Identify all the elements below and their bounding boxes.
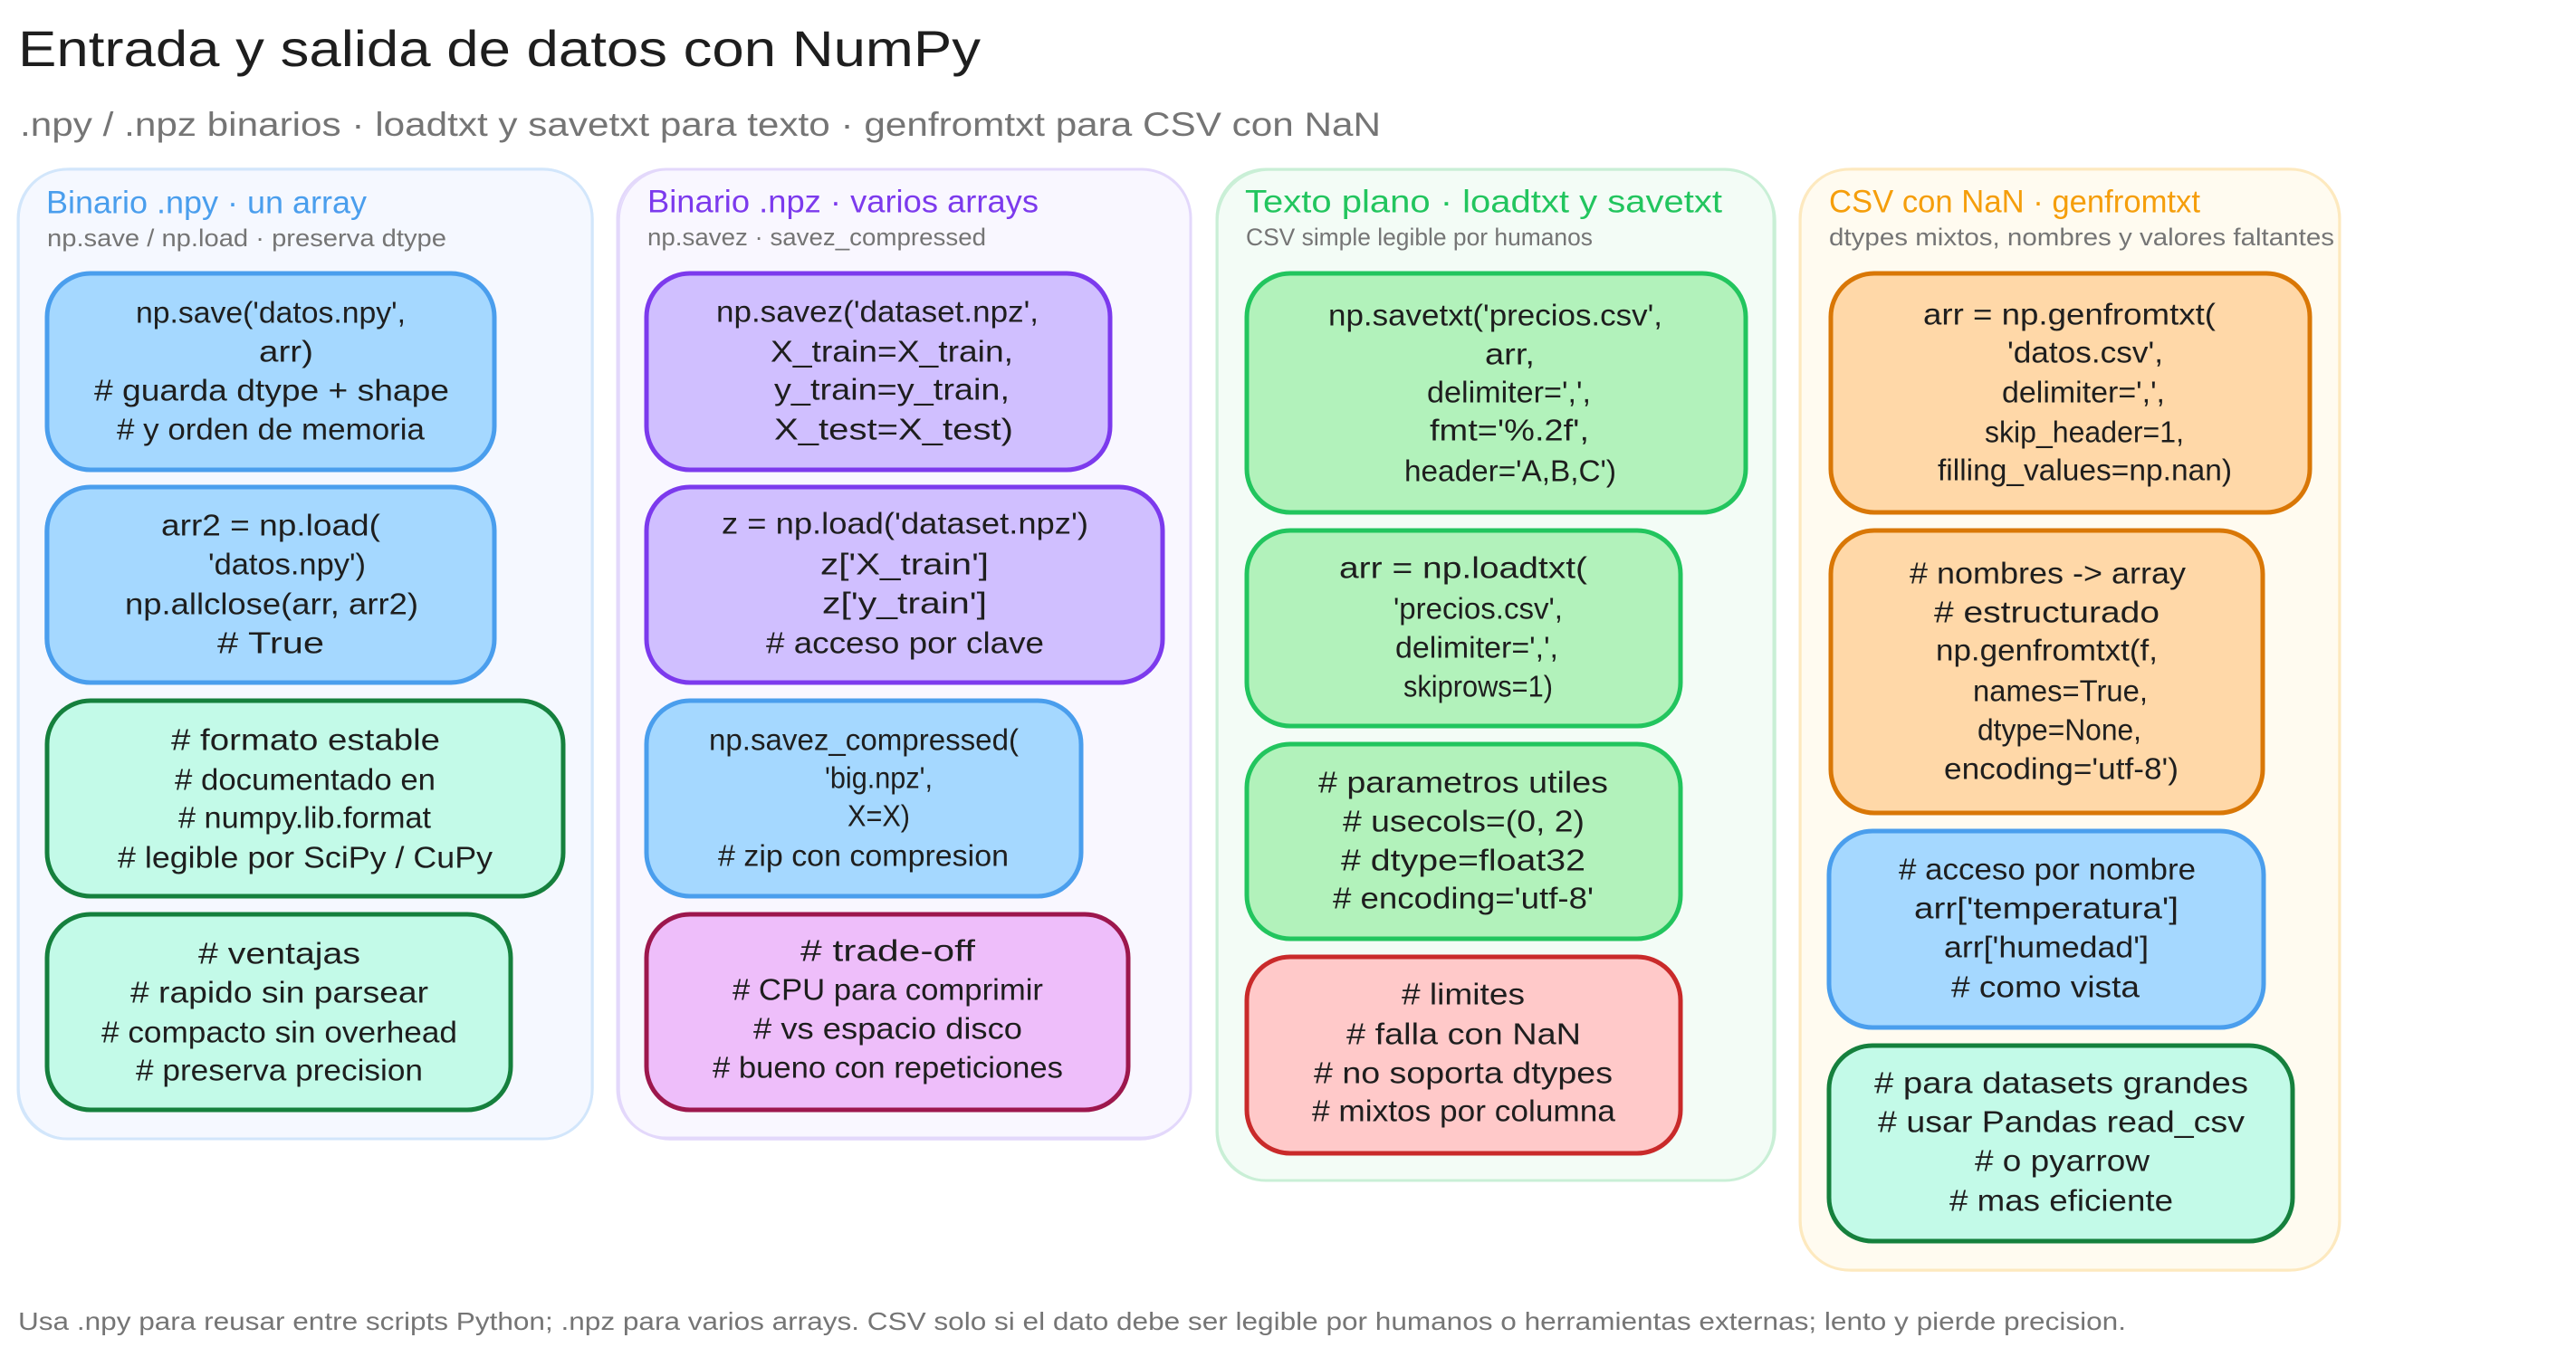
- card: np.loadtxt: arr = np.loadtxt(: [1339, 550, 1587, 585]
- card: parametros utiles: [1247, 744, 1681, 939]
- card: formato estable: # formato estable: [171, 722, 440, 757]
- card: np.genfromtxt: arr = np.genfromtxt(: [1923, 297, 2216, 331]
- card: datasets grandes: # usar Pandas read_csv: [1878, 1104, 2246, 1139]
- card: np.genfromtxt: filling_values=np.nan): [1938, 453, 2232, 487]
- card: ventajas: [47, 914, 511, 1110]
- card: formato estable: # numpy.lib.format: [178, 800, 431, 835]
- card: np.savetxt: [1247, 273, 1746, 512]
- card: parametros utiles: # dtype=float32: [1341, 844, 1585, 876]
- panel: texto plano: [1217, 169, 1776, 1180]
- card: ventajas: # compacto sin overhead: [101, 1016, 457, 1048]
- card: ventajas: # ventajas: [198, 936, 360, 970]
- panel heading: Binario .npz · varios arrays: [647, 185, 1039, 219]
- card: np.save: # guarda dtype + shape: [94, 373, 449, 407]
- panel subheading: dtypes mixtos, nombres y valores faltantes: [1829, 224, 2334, 251]
- panel heading: Texto plano · loadtxt y savetxt: [1245, 185, 1722, 219]
- card: np.load npz: z['y_train']: [822, 587, 987, 619]
- card: np.load npz: # acceso por clave: [766, 626, 1044, 659]
- panel subheading: np.save / np.load · preserva dtype: [47, 225, 446, 252]
- card: trade-off: [646, 914, 1128, 1110]
- card: parametros utiles: # usecols=(0, 2): [1343, 804, 1585, 838]
- panel subheading: np.savez · savez_compressed: [647, 224, 986, 251]
- card: limites: [1247, 957, 1681, 1153]
- card: savez_compressed: 'big.npz',: [825, 760, 933, 795]
- card: np.loadtxt: skiprows=1): [1403, 670, 1553, 702]
- panel: binario npz: [618, 169, 1191, 1140]
- card: np.save: arr): [259, 335, 313, 368]
- card: savez_compressed: [646, 701, 1081, 896]
- card: limites: # falla con NaN: [1346, 1018, 1581, 1050]
- card: datasets grandes: [1829, 1046, 2293, 1241]
- card: array estructurado: [1831, 530, 2263, 813]
- card: savez_compressed: np.savez_compressed(: [709, 722, 1019, 757]
- panel heading: Binario .npy · un array: [46, 185, 368, 221]
- card: limites: # limites: [1402, 978, 1525, 1010]
- card: acceso por nombre: [1829, 831, 2264, 1027]
- card: np.savez: X_train=X_train,: [771, 335, 1013, 368]
- card: np.genfromtxt: skip_header=1,: [1985, 415, 2184, 449]
- panel: binario npy: [18, 168, 593, 1139]
- card: np.save: [46, 272, 494, 470]
- card: array estructurado: names=True,: [1973, 674, 2148, 708]
- card: np.savez: X_test=X_test): [774, 413, 1013, 445]
- card: np.savetxt: fmt='%.2f',: [1430, 413, 1589, 447]
- card: np.savetxt: arr,: [1485, 337, 1535, 371]
- card: np.load npz: z['X_train']: [820, 547, 989, 581]
- footer note: Usa .npy para reusar entre scripts Python; .npz para varios arrays. CSV solo si el dato debe ser legible por humanos o herramientas externas; lento y pierde precision.: [18, 1307, 2126, 1335]
- card: np.genfromtxt: 'datos.csv',: [2007, 335, 2163, 369]
- panel: csv con nan: [1800, 168, 2340, 1271]
- card: datasets grandes: # o pyarrow: [1975, 1144, 2150, 1177]
- card: np.load npz: z = np.load('dataset.npz'): [722, 507, 1088, 540]
- card: np.loadtxt: delimiter=',',: [1395, 630, 1558, 664]
- card: trade-off: # trade-off: [800, 934, 976, 967]
- card: array estructurado: # nombres -> array: [1910, 556, 2187, 590]
- card: np.savetxt: np.savetxt('precios.csv',: [1328, 299, 1662, 331]
- card: np.genfromtxt: [1831, 273, 2310, 512]
- card: trade-off: # CPU para comprimir: [733, 972, 1043, 1007]
- title: Entrada y salida de datos con NumPy: [18, 20, 981, 77]
- card: np.load: [45, 486, 495, 683]
- card: limites: # mixtos por columna: [1312, 1094, 1616, 1128]
- card: parametros utiles: # encoding='utf-8': [1333, 882, 1594, 914]
- card: np.genfromtxt: delimiter=',',: [2002, 375, 2165, 409]
- card: np.savetxt: delimiter=',',: [1427, 375, 1591, 409]
- card: trade-off: # vs espacio disco: [753, 1012, 1022, 1045]
- card: np.loadtxt: 'precios.csv',: [1393, 592, 1563, 625]
- card: limites: # no soporta dtypes: [1314, 1056, 1613, 1090]
- card: array estructurado: # estructurado: [1934, 596, 2159, 628]
- card: acceso por nombre: arr['humedad']: [1944, 931, 2149, 963]
- card: np.load: 'datos.npy'): [208, 547, 366, 581]
- card: np.load: # True: [217, 626, 324, 659]
- card: np.savez: [646, 273, 1110, 470]
- card: ventajas: # rapido sin parsear: [130, 976, 428, 1008]
- card: datasets grandes: # mas eficiente: [1949, 1184, 2173, 1217]
- card: np.load: arr2 = np.load(: [161, 509, 380, 541]
- card: formato estable: # documentado en: [175, 762, 436, 797]
- card: np.save: # y orden de memoria: [117, 413, 426, 445]
- card: savez_compressed: # zip con compresion: [718, 838, 1009, 873]
- card: trade-off: # bueno con repeticiones: [713, 1050, 1063, 1085]
- card: array estructurado: dtype=None,: [1977, 713, 2141, 746]
- card: np.savez: np.savez('dataset.npz',: [716, 295, 1039, 328]
- card: np.loadtxt: [1247, 530, 1681, 726]
- card: datasets grandes: # para datasets grandes: [1874, 1066, 2248, 1099]
- card: formato estable: # legible por SciPy / CuPy: [118, 840, 493, 874]
- card: np.load npz: [646, 487, 1163, 683]
- card: acceso por nombre: # como vista: [1951, 970, 2140, 1003]
- card: ventajas: # preserva precision: [136, 1054, 423, 1086]
- card: array estructurado: encoding='utf-8'): [1944, 751, 2179, 786]
- card: np.save: np.save('datos.npy',: [136, 295, 406, 330]
- card: np.load: np.allclose(arr, arr2): [125, 587, 418, 621]
- card: np.savez: y_train=y_train,: [774, 373, 1010, 406]
- card: acceso por nombre: arr['temperatura']: [1914, 891, 2179, 925]
- card: acceso por nombre: # acceso por nombre: [1899, 853, 2196, 885]
- panel heading: CSV con NaN · genfromtxt: [1829, 185, 2200, 219]
- card: parametros utiles: # parametros utiles: [1318, 766, 1608, 798]
- subtitle: .npy / .npz binarios · loadtxt y savetxt para texto · genfromtxt para CSV con NaN: [20, 106, 1381, 143]
- card: array estructurado: np.genfromtxt(f,: [1936, 634, 2158, 666]
- card: formato estable: [47, 701, 563, 896]
- card: np.savetxt: header='A,B,C'): [1404, 454, 1616, 487]
- panel subheading: CSV simple legible por humanos: [1246, 224, 1593, 251]
- card: savez_compressed: X=X): [847, 798, 910, 833]
